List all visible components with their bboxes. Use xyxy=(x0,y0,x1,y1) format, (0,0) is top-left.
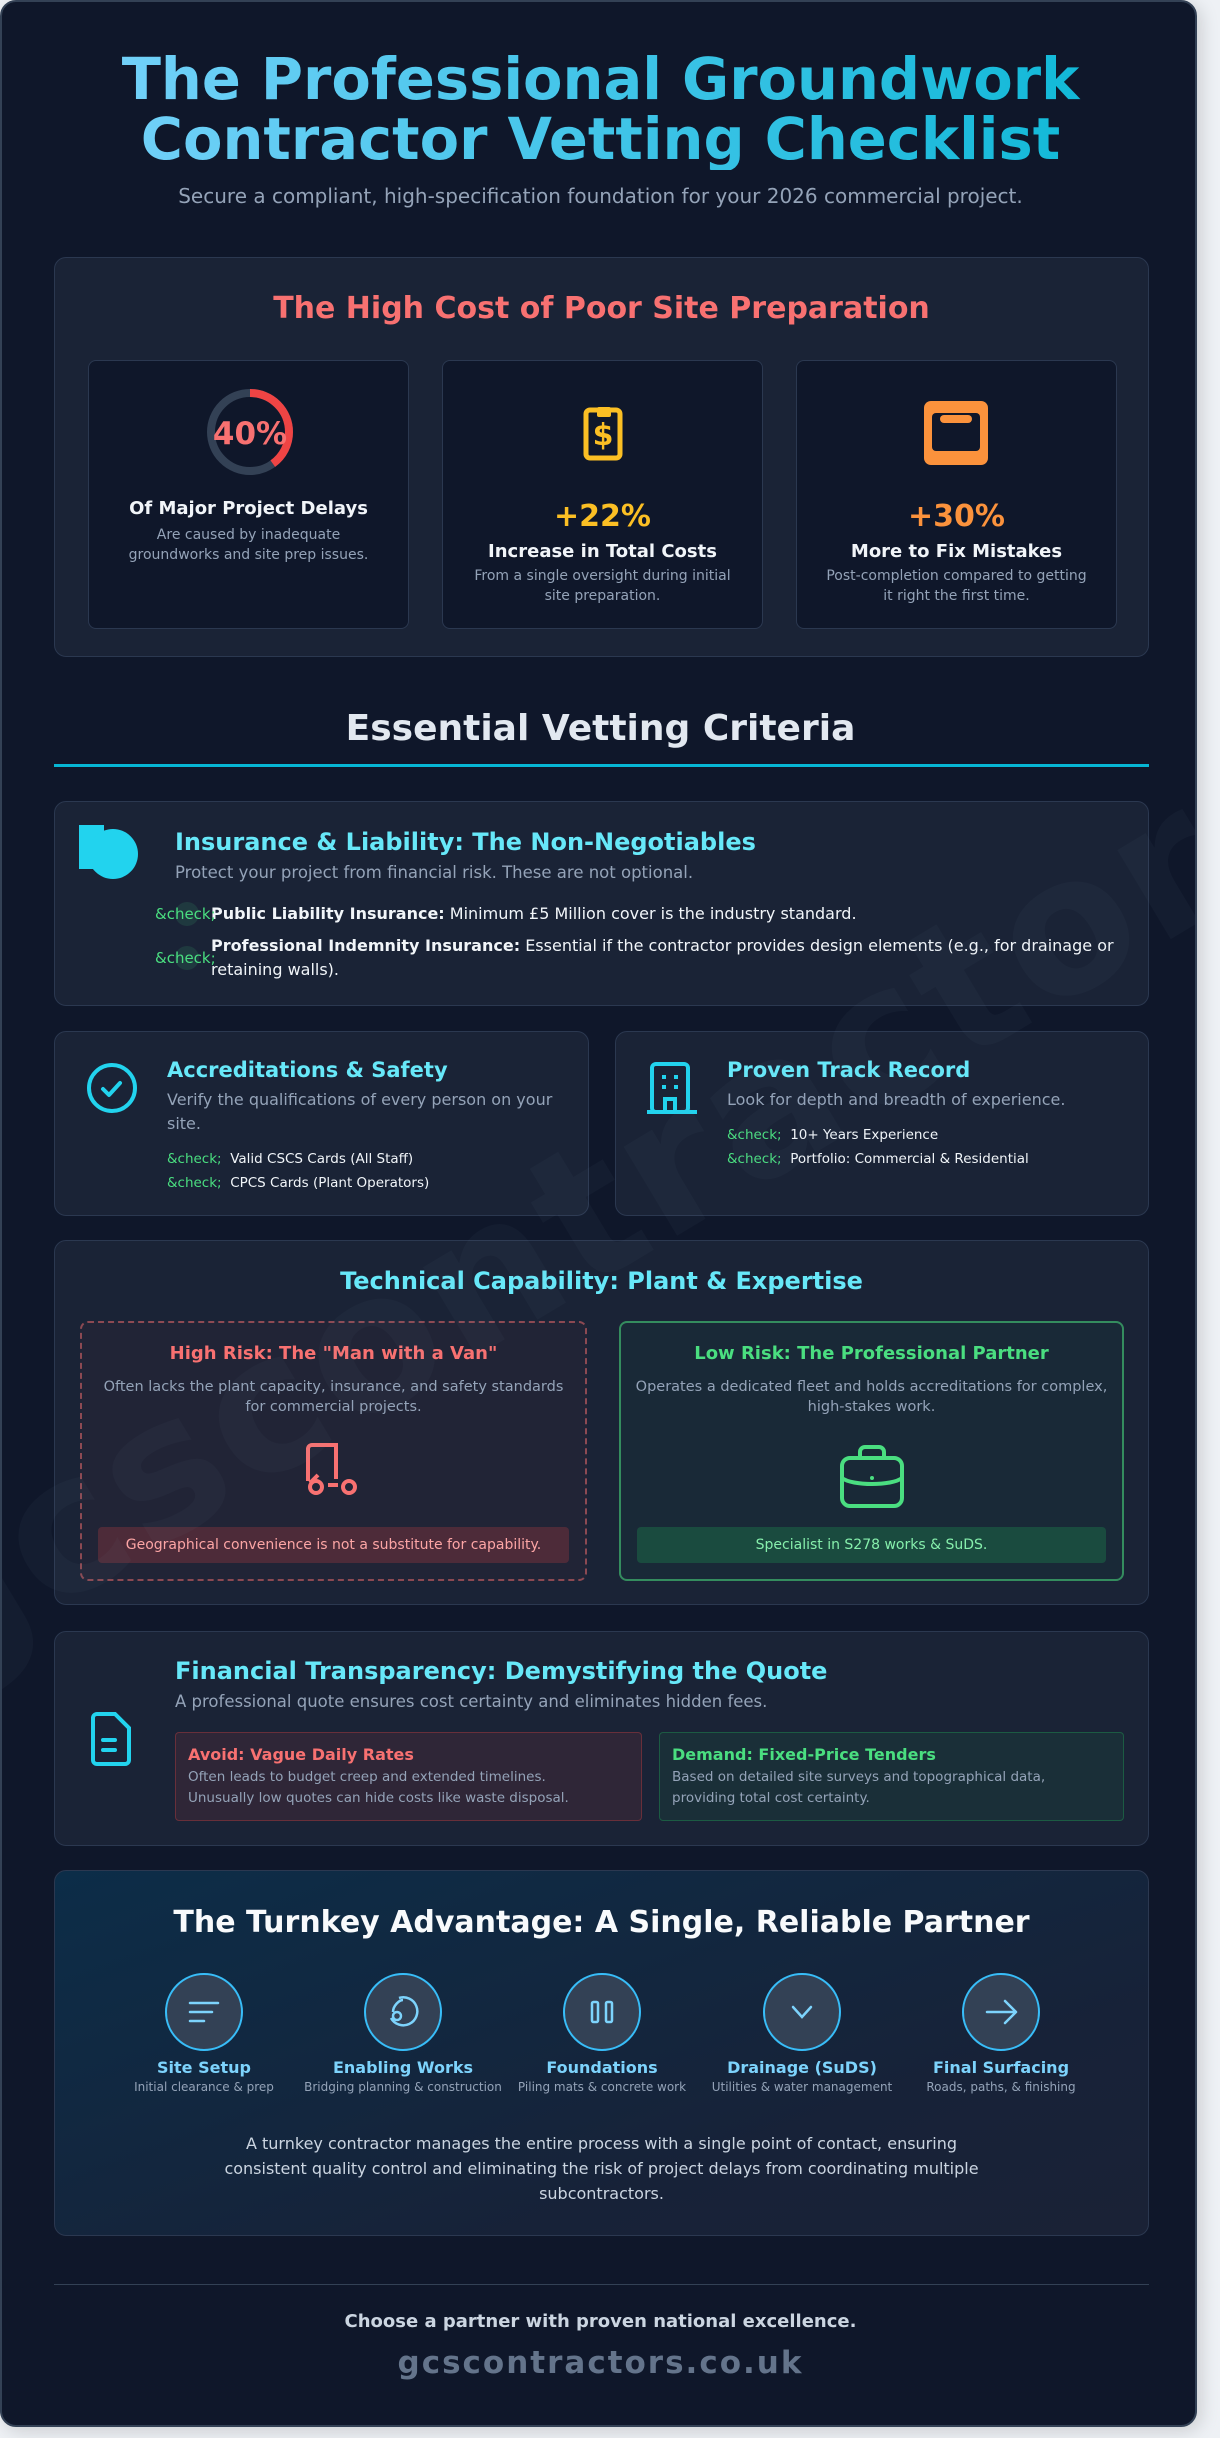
heading: Proven Track Record xyxy=(727,1058,970,1082)
icon: money: $ xyxy=(593,418,613,453)
step: drainage: Utilities & water management xyxy=(712,2080,892,2094)
icon: building xyxy=(647,1062,697,1114)
stat card: +30% xyxy=(796,360,1117,629)
avoid box xyxy=(175,1732,642,1821)
step: foundations: Foundations xyxy=(546,2058,658,2077)
panel: high cost xyxy=(54,257,1149,657)
subtitle: Protect your project from financial risk. These are not optional. xyxy=(175,863,693,882)
footer tagline: Choose a partner with proven national excellence. xyxy=(345,2311,856,2332)
avoid box: Avoid: Vague Daily Rates xyxy=(188,1745,414,1764)
title: Low Risk: The Professional Partner xyxy=(694,1343,1049,1364)
title: The Professional Groundwork xyxy=(122,46,1079,113)
desc: Post-completion compared to getting it right the first time. xyxy=(826,568,1087,604)
step: site setup: Site Setup xyxy=(157,2058,251,2077)
checklist xyxy=(167,1151,429,1191)
callout bar: Geographical convenience is not a substitute for capability. xyxy=(126,1537,541,1553)
desc: Often lacks the plant capacity, insurance, and safety standards for commercial projects. xyxy=(104,1379,563,1415)
step: foundations: Piling mats & concrete work xyxy=(518,2080,686,2094)
heading: The Turnkey Advantage: A Single, Reliable Partner xyxy=(173,1905,1030,1940)
ring chart: 40% xyxy=(213,416,287,452)
step: site setup: Initial clearance & prep xyxy=(134,2080,274,2094)
value: +22% xyxy=(554,499,651,534)
label: Of Major Project Delays xyxy=(129,498,368,519)
step: site setup xyxy=(134,1973,274,2094)
checklist xyxy=(155,902,1114,979)
demand box: Based on detailed site surveys and topographical data, providing total cost certainty. xyxy=(672,1769,1045,1806)
checklist: &check; CPCS Cards (Plant Operators) xyxy=(167,1175,429,1191)
callout bar xyxy=(637,1527,1106,1563)
heading: Insurance & Liability: The Non-Negotiables xyxy=(175,828,756,856)
icon: briefcase xyxy=(840,1445,904,1508)
process steps xyxy=(134,1973,1076,2094)
title: Contractor Vetting Checklist xyxy=(141,106,1060,173)
demand box: Demand: Fixed-Price Tenders xyxy=(672,1745,936,1764)
stat card: 40% xyxy=(88,360,409,629)
high risk box xyxy=(80,1321,587,1581)
section heading: vetting criteria: Essential Vetting Criteria xyxy=(346,708,855,749)
heading: Financial Transparency: Demystifying the Quote xyxy=(175,1657,827,1685)
checklist xyxy=(727,1127,1029,1167)
checklist: Public Liability Insurance: Minimum £5 Million cover is the industry standard. xyxy=(211,904,857,923)
panel: insurance xyxy=(54,801,1149,1006)
desc: Look for depth and breadth of experience. xyxy=(727,1090,1065,1109)
value: +30% xyxy=(908,499,1005,534)
step: enabling works: Bridging planning & construction xyxy=(304,2080,502,2094)
summary paragraph: A turnkey contractor manages the entire process with a single point of contact, ensuring consistent quality control and eliminating the risk of project delays from coordinating multiple subcontractors. xyxy=(224,2134,979,2203)
label: Increase in Total Costs xyxy=(488,541,717,562)
checklist: Professional Indemnity Insurance: Essential if the contractor provides design elements (e.g., for drainage or retaining walls). xyxy=(211,936,1114,979)
step: drainage: Drainage (SuDS) xyxy=(727,2058,877,2077)
checklist: &check; Portfolio: Commercial & Residential xyxy=(727,1151,1029,1167)
step: enabling works xyxy=(304,1973,502,2094)
avoid box: Often leads to budget creep and extended timelines. xyxy=(188,1769,546,1785)
checklist: &check; xyxy=(155,905,216,923)
step: final surfacing: Final Surfacing xyxy=(933,2058,1069,2077)
panel: technical capability xyxy=(54,1240,1149,1605)
ring chart xyxy=(207,389,293,475)
demand box xyxy=(659,1732,1124,1821)
title: High Risk: The "Man with a Van" xyxy=(170,1343,497,1364)
icon: document xyxy=(91,1712,131,1766)
panel: track record xyxy=(615,1031,1149,1216)
panel: financial transparency xyxy=(54,1631,1149,1846)
step: final surfacing: Roads, paths, & finishing xyxy=(926,2080,1076,2094)
panel: accreditations xyxy=(54,1031,589,1216)
checklist: &check; 10+ Years Experience xyxy=(727,1127,938,1143)
title xyxy=(2,50,1199,170)
panel: turnkey advantage xyxy=(54,1870,1149,2236)
icon: truck xyxy=(306,1443,357,1495)
checklist: &check; Valid CSCS Cards (All Staff) xyxy=(167,1151,413,1167)
label: More to Fix Mistakes xyxy=(851,541,1062,562)
desc: From a single oversight during initial site preparation. xyxy=(474,568,731,604)
avoid box: Unusually low quotes can hide costs like waste disposal. xyxy=(188,1790,569,1806)
icon: check circle xyxy=(87,1063,137,1113)
heading: high cost: The High Cost of Poor Site Preparation xyxy=(273,291,930,326)
subtitle: Secure a compliant, high-specification foundation for your 2026 commercial project. xyxy=(178,184,1023,208)
step: enabling works: Enabling Works xyxy=(333,2058,473,2077)
callout bar xyxy=(98,1527,569,1563)
desc: Are caused by inadequate groundworks and site prep issues. xyxy=(129,527,368,563)
heading: Technical Capability: Plant & Expertise xyxy=(340,1267,863,1295)
icon: shield xyxy=(79,825,138,879)
desc: Operates a dedicated fleet and holds accreditations for complex, high-stakes work. xyxy=(636,1379,1107,1415)
step: foundations xyxy=(518,1973,686,2094)
desc: Verify the qualifications of every person on your site. xyxy=(167,1090,552,1133)
heading: Accreditations & Safety xyxy=(167,1058,448,1082)
step: drainage xyxy=(712,1973,892,2094)
footer url: gcscontractors.co.uk xyxy=(398,2345,803,2381)
icon: money xyxy=(584,407,622,460)
callout bar: Specialist in S278 works & SuDS. xyxy=(756,1537,987,1553)
step: final surfacing xyxy=(926,1973,1076,2094)
stat card: +22% xyxy=(442,360,763,629)
checklist: &check; xyxy=(155,949,216,967)
low risk box xyxy=(619,1321,1124,1581)
icon: box xyxy=(924,401,988,465)
subtitle: A professional quote ensures cost certainty and eliminates hidden fees. xyxy=(175,1692,767,1711)
